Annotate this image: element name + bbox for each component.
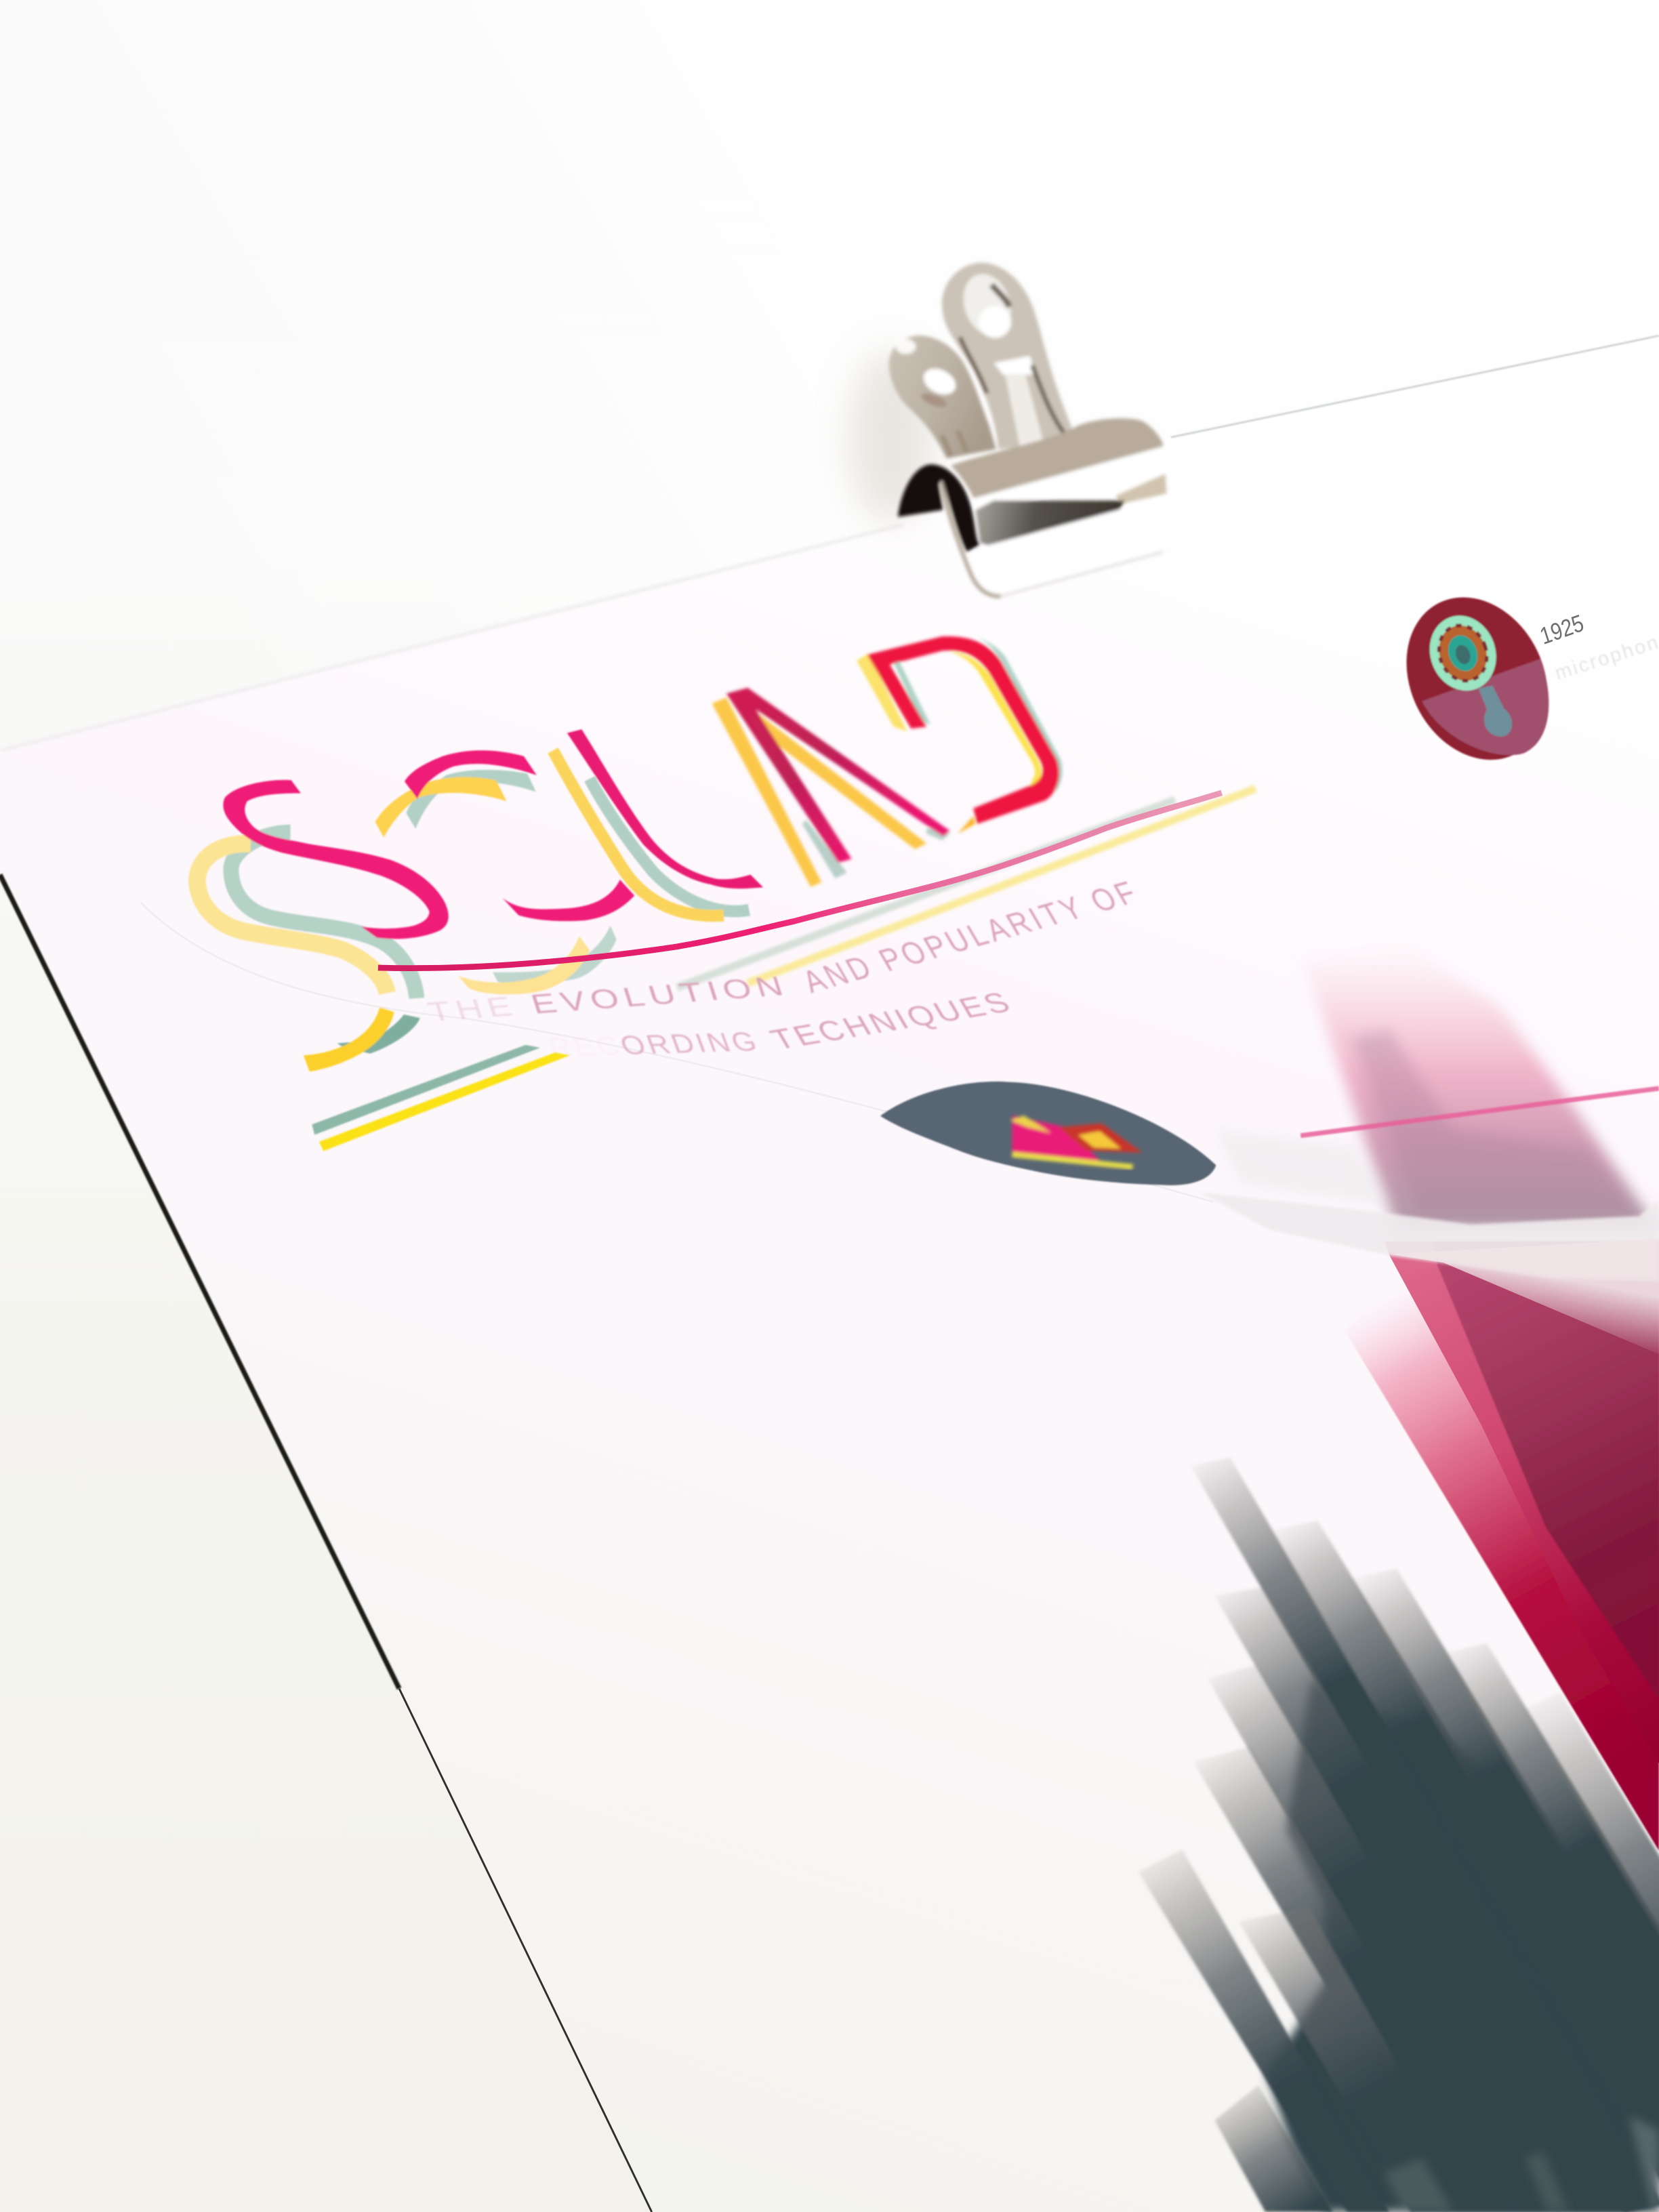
timeline circle 1925 with microphone bbox=[1380, 573, 1574, 784]
logo U letter bbox=[553, 729, 763, 916]
darker mauve overlay bbox=[1351, 1030, 1637, 1216]
curved pink swoosh bbox=[378, 793, 1222, 968]
icon: speaker and book bbox=[1010, 1115, 1143, 1167]
logo N and D letters bbox=[712, 636, 1063, 887]
bulldog clip bbox=[889, 262, 1168, 596]
yellow N bbox=[712, 697, 926, 887]
stripe B bbox=[1268, 1521, 1659, 2212]
dark slate pixel stripes bbox=[1139, 1457, 1659, 2212]
barrel dark reflection bbox=[976, 501, 1125, 550]
poster top edge line bbox=[0, 335, 1659, 750]
film edge curve bbox=[141, 903, 1213, 1202]
mint N bbox=[802, 820, 950, 878]
stripe L bbox=[1239, 1907, 1481, 2212]
yellow S bbox=[197, 844, 387, 993]
rear handle bbox=[889, 335, 996, 459]
barrel dark inner arch bbox=[898, 464, 981, 552]
stripe H bbox=[1208, 1664, 1573, 2212]
icon: microphone head bbox=[1419, 607, 1507, 700]
mint O bottom arc bbox=[493, 926, 617, 983]
mint D bbox=[894, 637, 1063, 793]
yellow underline bbox=[319, 1052, 570, 1151]
pink U bbox=[567, 729, 763, 888]
subtitle line 2 left part: RECORDING bbox=[544, 1026, 764, 1063]
pale film refracted underlines bbox=[677, 789, 1256, 987]
pink stripe mass bbox=[1303, 948, 1659, 1230]
subtitle line 1 right part: AND POPULARITY OF bbox=[796, 874, 1146, 1000]
poster left edge: black board edge bbox=[0, 875, 652, 2212]
pink line across the stripes bbox=[1300, 1088, 1659, 1136]
subtitle line 1 left part: THE EVOLUTION bbox=[424, 970, 792, 1027]
subtitle text bbox=[424, 874, 1146, 1063]
barrel lower lip bbox=[969, 497, 1168, 594]
curled transparent film band bbox=[1199, 1192, 1659, 1354]
yellow O bottom arc bbox=[458, 936, 590, 994]
barrel bright band bbox=[974, 446, 1168, 510]
yellow D bbox=[857, 652, 1041, 834]
gradient stripes group bbox=[1139, 1457, 1659, 2212]
front handle bbox=[942, 262, 1075, 451]
mint underline bbox=[312, 1045, 540, 1135]
icon: microphone handle bbox=[1479, 686, 1512, 737]
mint S bbox=[231, 832, 417, 998]
stripe C bbox=[1356, 1569, 1659, 2081]
stripe A bbox=[1191, 1457, 1659, 2212]
crimson N bbox=[726, 688, 950, 863]
dark circle icon under the film bbox=[880, 1082, 1216, 1185]
mint O top arc bbox=[406, 770, 536, 829]
barrel tan band bbox=[1115, 474, 1166, 504]
crimson diagonal block bbox=[1345, 1242, 1659, 1851]
solid dark body bbox=[1267, 1679, 1659, 2212]
stripe J bbox=[1139, 1849, 1389, 2212]
pink O top arc bbox=[405, 750, 537, 799]
stripe K bbox=[1214, 2085, 1333, 2212]
pink S bbox=[223, 780, 449, 939]
mint U bbox=[590, 779, 749, 912]
faded pink stripes seen through the curled film bbox=[1213, 948, 1659, 1230]
pink O bottom arc bbox=[502, 880, 634, 921]
timeline label 1925: 1925 bbox=[1537, 610, 1587, 650]
stripe E bbox=[1528, 1694, 1659, 1935]
pale grey streak bbox=[1213, 1128, 1389, 1206]
stripe I bbox=[1193, 1746, 1517, 2212]
barrel top bbox=[951, 418, 1163, 498]
red D bbox=[867, 636, 1059, 824]
yellow O top arc bbox=[375, 777, 506, 838]
barrel left curved edge bbox=[942, 482, 1001, 596]
circle background bbox=[1380, 573, 1574, 784]
stripe D bbox=[1449, 1644, 1659, 2009]
stripe G bbox=[1214, 1587, 1629, 2212]
subtitle line 2 right part: TECHNIQUES bbox=[765, 986, 1019, 1055]
lighter grey stripes at the bottom and right of the dark block bbox=[1384, 2116, 1659, 2212]
gold and mint S tail bbox=[304, 1008, 420, 1071]
bulldog clip shadow bbox=[849, 352, 934, 522]
barrel lower edge line bbox=[1001, 552, 1163, 596]
logo left part: S and O letters bbox=[197, 750, 634, 1151]
circle lower half tint bbox=[1422, 659, 1549, 755]
yellow U bbox=[553, 750, 724, 916]
